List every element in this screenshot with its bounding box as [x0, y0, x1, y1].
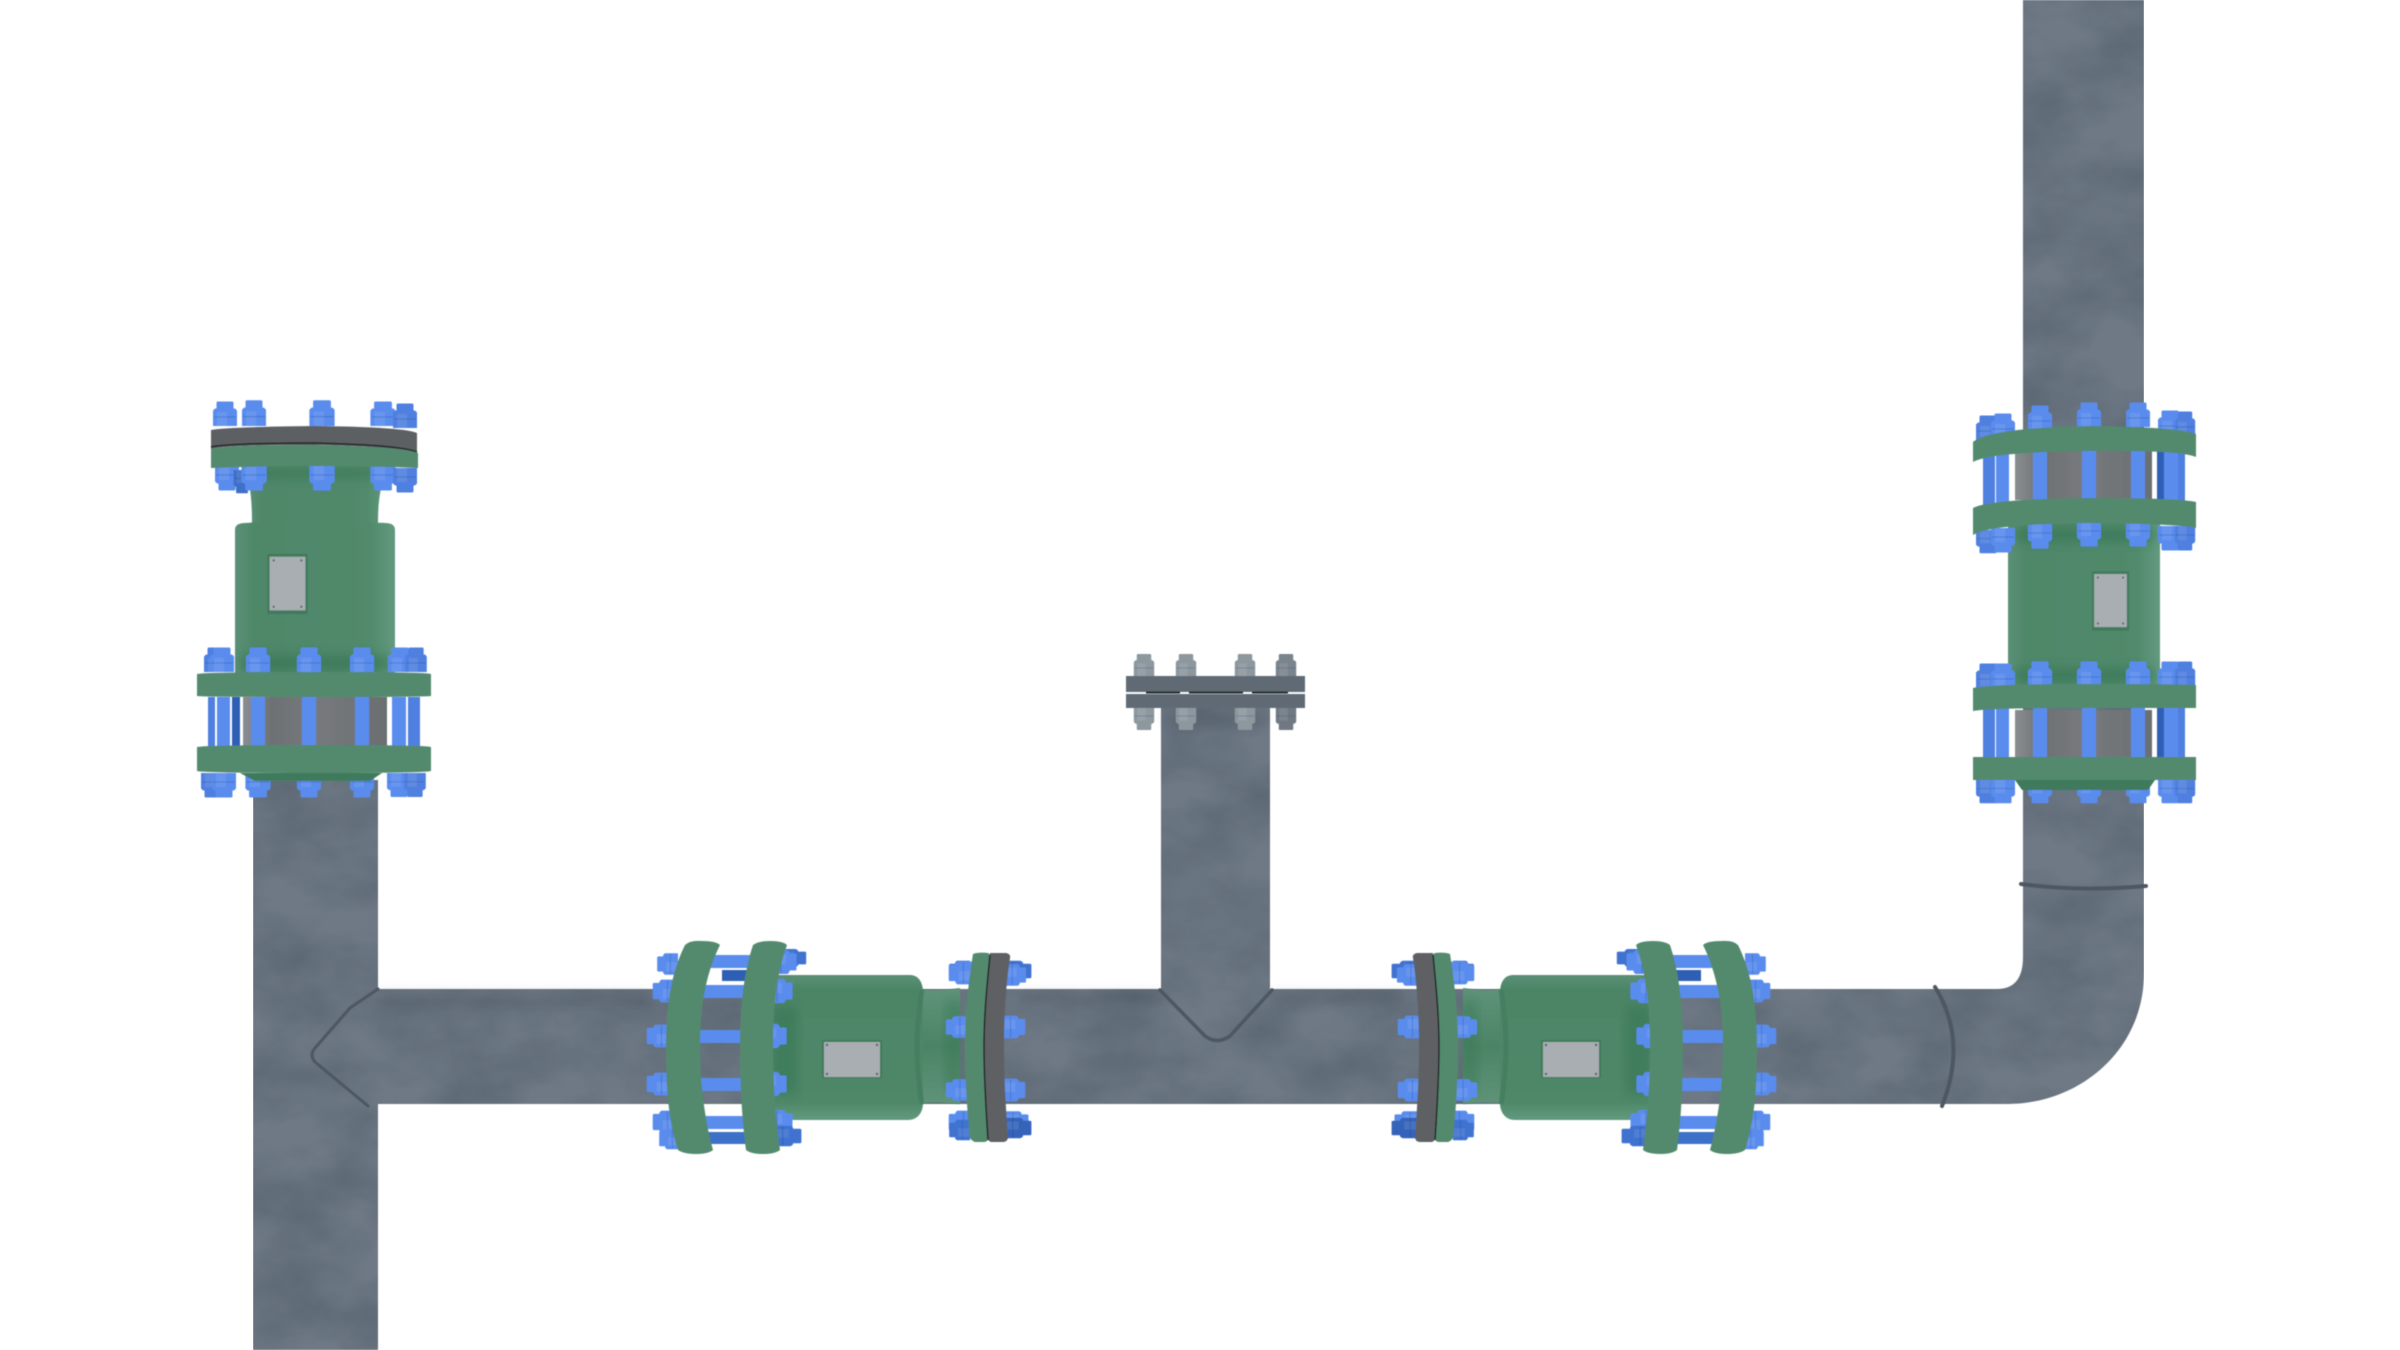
- exposed pipe gap: [243, 697, 387, 747]
- green flanges: [197, 445, 431, 781]
- bolts: [1134, 654, 1296, 730]
- joint: top left vertical: [197, 400, 431, 798]
- nameplate: [2092, 571, 2129, 631]
- bolt shadows: [2015, 528, 2155, 682]
- sleeve body: [2008, 522, 2160, 687]
- joint: left horizontal: [647, 941, 1031, 1154]
- pipe welds: [312, 884, 2146, 1106]
- tee weld: left: [312, 989, 378, 1106]
- joint: right vertical: [1973, 402, 2196, 803]
- reducer neck: [245, 466, 388, 526]
- joint: right horizontal: [1392, 941, 1776, 1154]
- bolt shadows: [240, 468, 390, 671]
- tie rods: [1983, 450, 2185, 758]
- elbow weld: vertical: [2021, 884, 2146, 889]
- green flanges: [1973, 426, 2196, 790]
- branch stub flange: [1126, 654, 1305, 730]
- pipe shading: [380, 712, 1402, 1008]
- branch stub pipe: [1161, 700, 1270, 1000]
- tie rods: [208, 697, 420, 747]
- elbow and right riser: [1990, 0, 2144, 1104]
- pipework: [253, 0, 2144, 1350]
- main horizontal pipe: [370, 989, 2010, 1104]
- tee weld: branch: [1160, 990, 1272, 1040]
- left riser pipe: [253, 780, 378, 1350]
- bolts: [201, 400, 427, 798]
- blind flange plates: [1126, 676, 1305, 708]
- sleeve body: [235, 521, 395, 680]
- gray top flange: [211, 426, 417, 454]
- nameplate: [267, 554, 308, 614]
- bolts: [1976, 402, 2195, 803]
- exposed pipe gaps: [2015, 450, 2152, 758]
- elbow weld: horizontal: [1935, 987, 1953, 1106]
- gasket: [1146, 692, 1288, 694]
